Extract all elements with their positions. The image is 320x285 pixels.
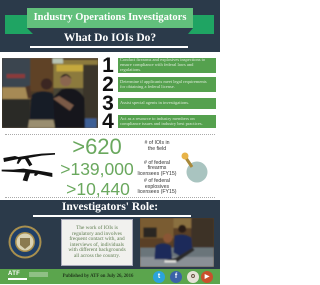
text box: role description: all across the country. xyxy=(74,252,120,258)
logo caption xyxy=(29,272,48,277)
icon: twitter xyxy=(153,271,165,283)
label: federal firearms licensees: licensees (FY15) xyxy=(138,171,176,177)
item 2 xyxy=(118,77,216,92)
logo swoosh xyxy=(8,278,27,280)
stat: explosives licensees: >10,440 xyxy=(66,179,130,199)
icon: rifles xyxy=(2,153,55,182)
icon: twitter: t xyxy=(158,273,160,280)
icon: bomb xyxy=(182,152,208,182)
label: federal firearms licensees: firearms xyxy=(148,165,166,171)
logo wordmark: ATF xyxy=(8,271,20,277)
stat: IOIs: >620 xyxy=(72,134,122,159)
label: IOIs in the field: # of IOIs in xyxy=(144,140,170,146)
icon: facebook xyxy=(170,271,182,283)
item 3 xyxy=(118,98,216,109)
icon: youtube xyxy=(201,271,213,283)
item 2: Determine if applicants meet legal requirements for obtaining a federal license. xyxy=(120,79,207,88)
icon: instagram: o xyxy=(191,273,195,280)
item 1: Conduct firearms and explosives inspections to ensure compliance with federal laws and regulations. xyxy=(120,57,205,72)
number 4: 4 xyxy=(102,110,114,133)
text box: role description xyxy=(61,219,133,266)
label: federal explosives licensees: licensees (FY15) xyxy=(138,189,176,195)
text box: role description: with different backgrounds xyxy=(68,247,126,253)
icon: instagram xyxy=(187,271,199,283)
heading: what do IOIs do: What Do IOIs Do? xyxy=(64,32,156,44)
ATF logo xyxy=(8,270,48,280)
label: federal explosives licensees xyxy=(138,178,176,195)
title banner: Industry Operations Investigators xyxy=(34,12,186,23)
label: federal firearms licensees: # of federal xyxy=(144,160,170,166)
photo: investigators in gun shop xyxy=(2,58,98,128)
label: federal explosives licensees: # of federal xyxy=(144,178,170,184)
heading underline xyxy=(30,46,188,48)
label: IOIs in the field xyxy=(144,140,170,152)
label: IOIs in the field: the field xyxy=(148,146,166,152)
heading underline xyxy=(33,214,191,216)
heading: investigators' role: Investigators' Role: xyxy=(62,201,158,213)
label: federal firearms licensees xyxy=(138,160,176,177)
numbered list xyxy=(102,54,114,133)
footer band xyxy=(0,269,220,284)
publication line: Published by ATF on July 26, 2016 xyxy=(63,274,133,279)
icon: ATF seal xyxy=(8,226,42,258)
icon: facebook: f xyxy=(175,273,177,280)
header band xyxy=(0,0,220,52)
number 2: 2 xyxy=(102,73,114,96)
text box: role description: interviews of, individuals xyxy=(70,242,124,248)
number 3: 3 xyxy=(102,92,114,115)
text box: role description: The work of IOIs is xyxy=(76,225,118,231)
title banner xyxy=(27,8,193,28)
text box: role description: regulatory and involves xyxy=(72,230,122,236)
stat: firearms licensees: >139,000 xyxy=(60,159,134,179)
divider xyxy=(5,134,215,135)
panel: investigators' role xyxy=(0,200,220,269)
photo: inspection at counter xyxy=(140,218,214,267)
divider xyxy=(5,197,215,198)
item 3: Assist special agents in investigations. xyxy=(120,100,189,105)
item 4 xyxy=(118,115,216,128)
item 4: Act as a resource to industry members on compliance issues and industry best practices. xyxy=(120,116,203,126)
ribbons xyxy=(5,15,214,34)
text box: role description: frequent contact with, and xyxy=(69,236,125,242)
label: federal explosives licensees: explosives xyxy=(145,184,169,190)
number 1: 1 xyxy=(102,54,114,77)
icon: youtube: ▶ xyxy=(205,274,209,280)
